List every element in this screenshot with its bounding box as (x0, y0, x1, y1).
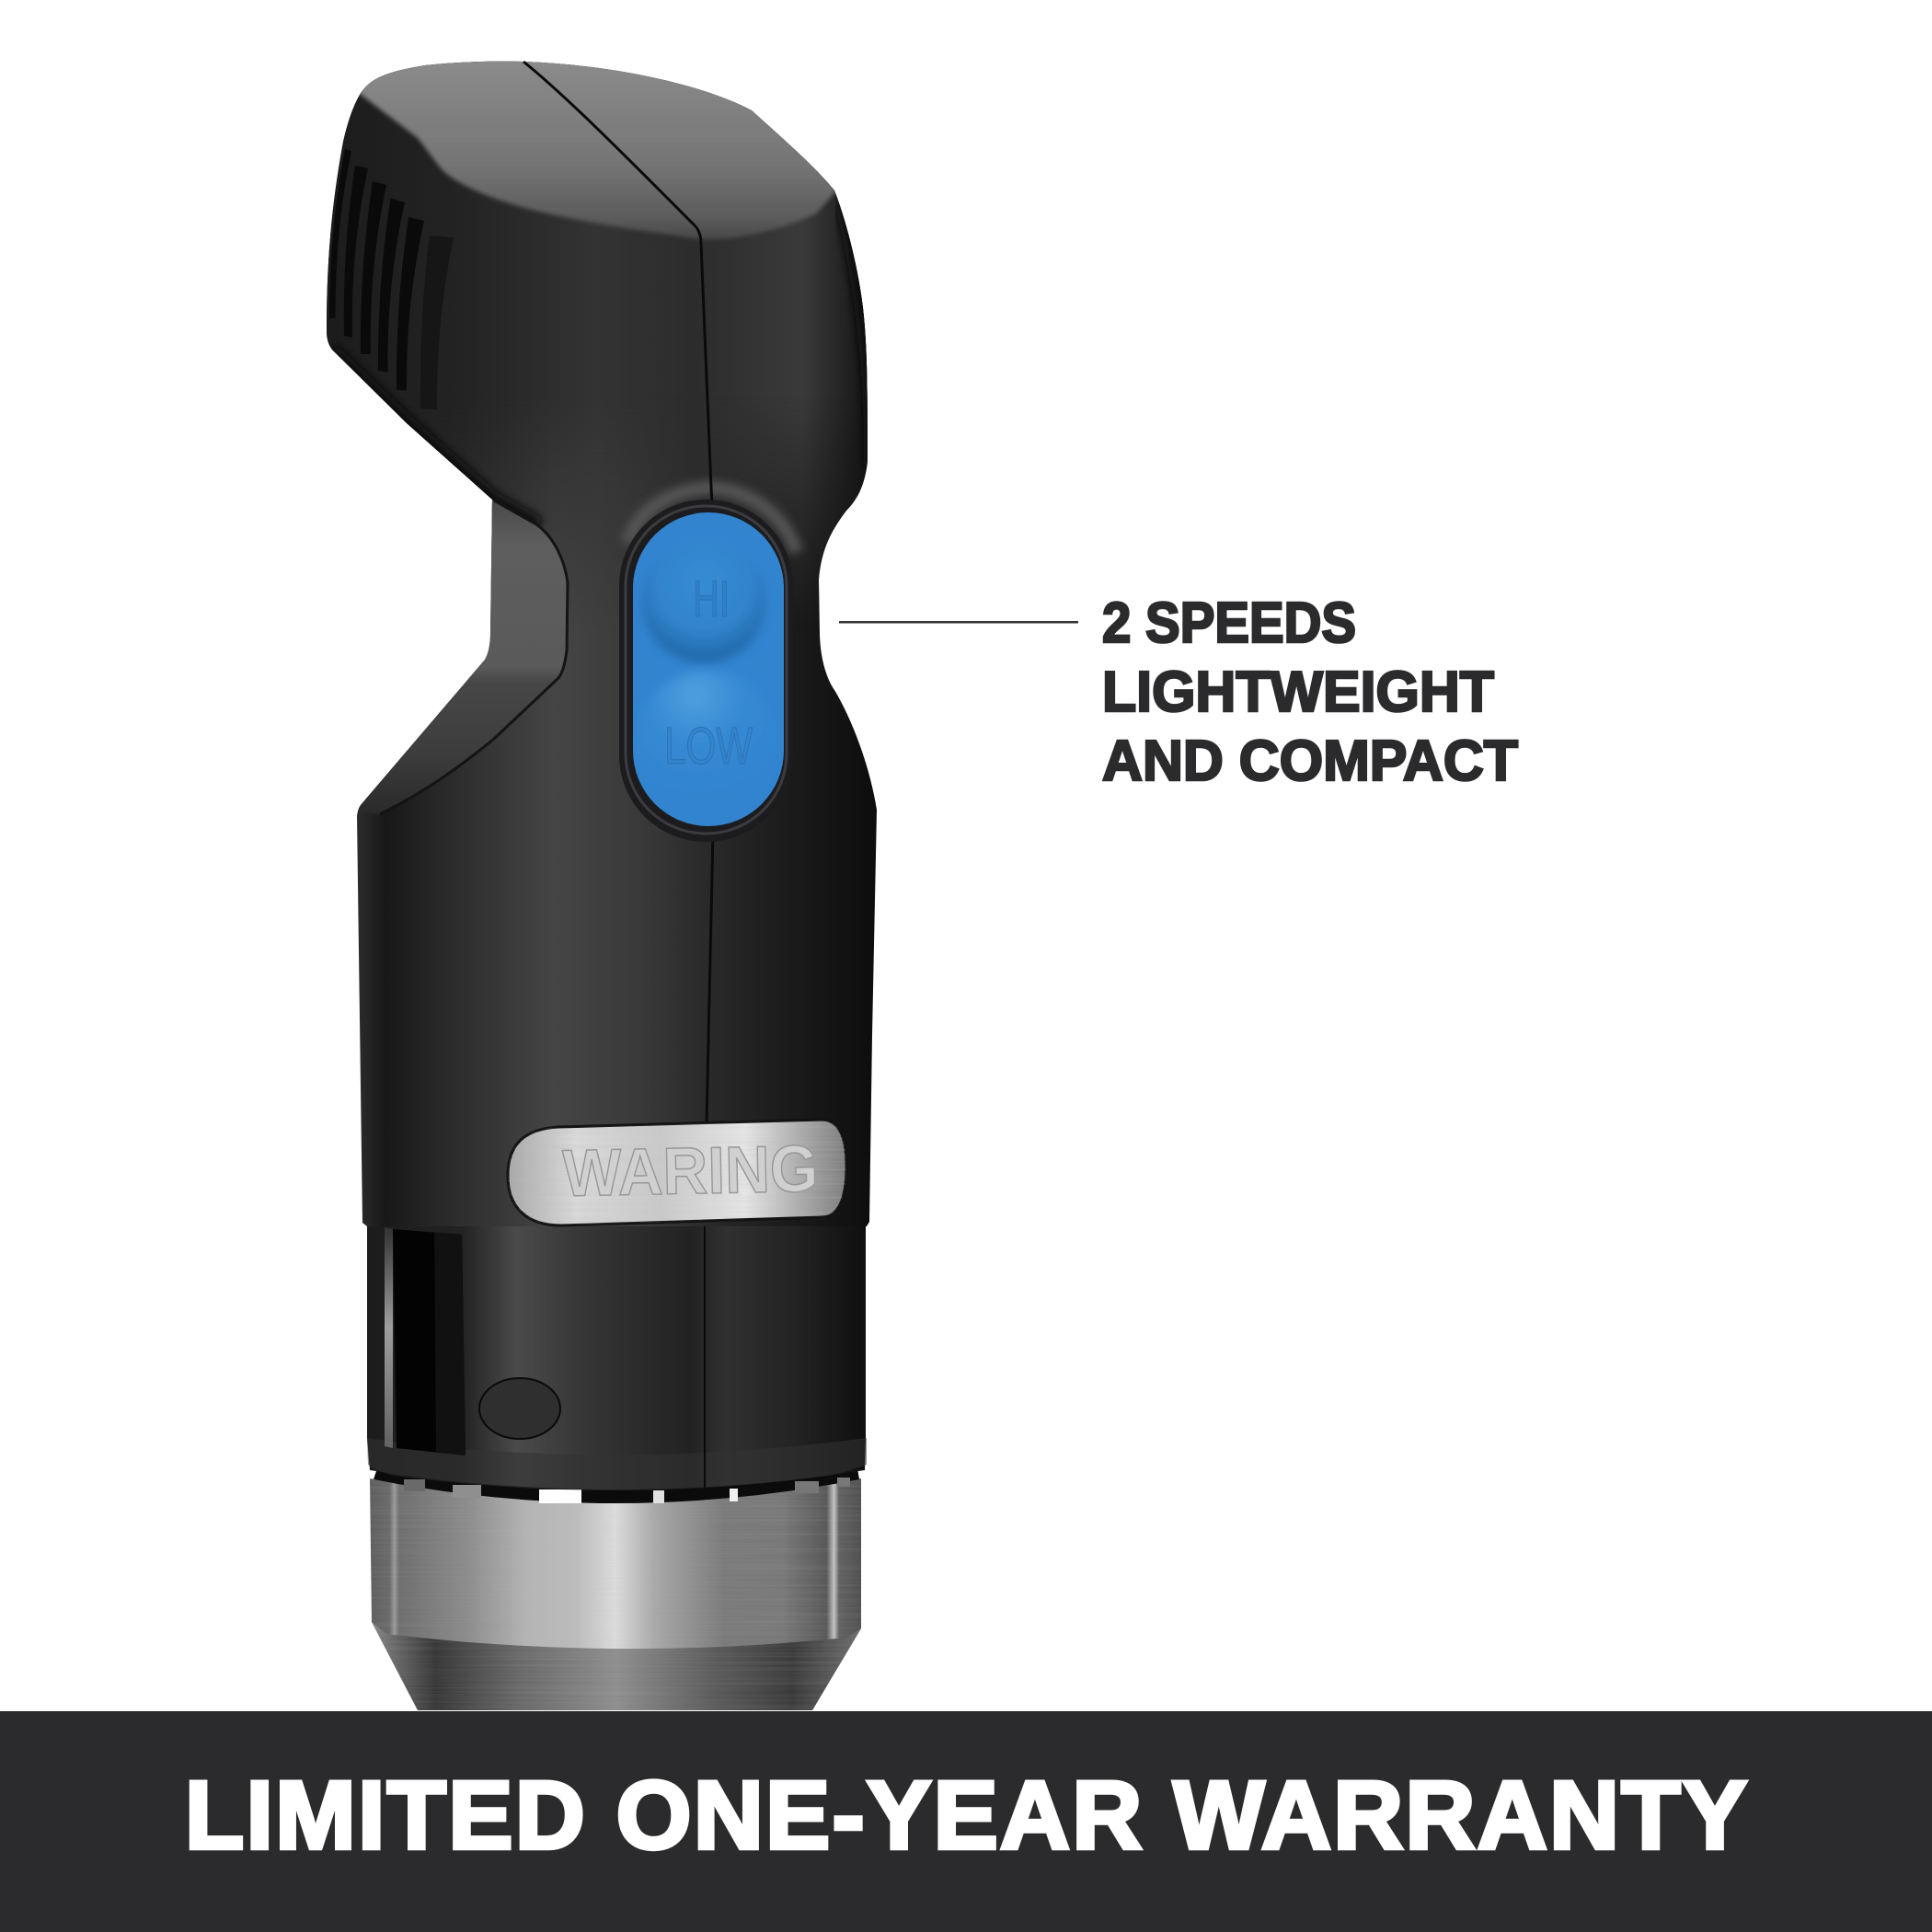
product: immersion blender (313, 46, 883, 1711)
banner text: LIMITED ONE-YEAR WARRANTY (185, 1762, 1747, 1869)
top seam (523, 62, 712, 504)
line 1: 2 SPEEDS (1102, 592, 1356, 655)
callout text (1102, 592, 1518, 793)
head underside shadow (331, 352, 538, 526)
oval indent (479, 1378, 560, 1439)
lower body (367, 1226, 867, 1490)
vent slots (329, 149, 454, 409)
button bezel (619, 500, 793, 842)
neck edge line (380, 500, 568, 814)
brand wordmark: WARING (562, 1133, 819, 1211)
HI dome (640, 583, 767, 666)
right edge shadow (842, 198, 872, 465)
top face (359, 61, 835, 241)
neck grip (359, 500, 568, 814)
side window (385, 1227, 466, 1455)
warranty banner (0, 1711, 1932, 1932)
HI label: HI (693, 569, 730, 627)
raised rim above the button (627, 488, 797, 552)
LOW dome (654, 670, 739, 738)
line 3: AND COMPACT (1102, 730, 1518, 793)
LOW label: LOW (664, 717, 753, 776)
stainless steel collar (368, 1472, 865, 1711)
callout leader line (839, 621, 1078, 624)
line 2: LIGHTWEIGHT (1102, 661, 1494, 724)
bottom ring (367, 1438, 867, 1490)
button face (633, 512, 784, 826)
bottom seam (707, 833, 713, 1122)
nameplate (506, 1118, 848, 1228)
speed button (619, 500, 793, 842)
gap between body and collar (374, 1468, 859, 1503)
lower seam (704, 1226, 706, 1490)
upper housing (313, 46, 883, 1226)
